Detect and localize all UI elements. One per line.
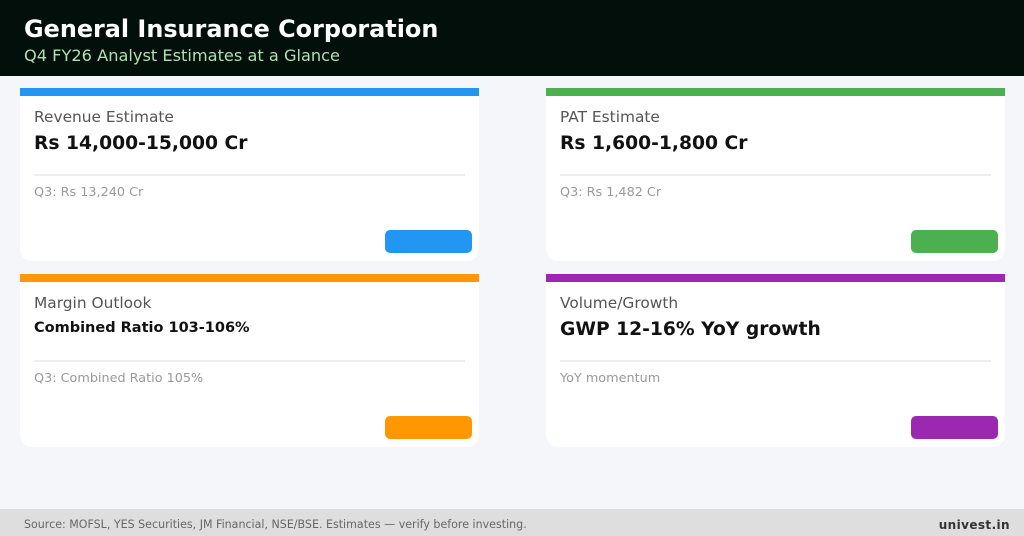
margin pill xyxy=(385,416,472,439)
margin accent bar xyxy=(20,274,479,282)
volume accent bar xyxy=(546,274,1005,282)
header band xyxy=(0,0,1024,76)
revenue value: Rs 14,000-15,000 Cr xyxy=(34,133,247,154)
revenue accent bar xyxy=(20,88,479,96)
footer band xyxy=(0,509,1024,536)
volume note: YoY momentum xyxy=(560,371,660,386)
revenue prior quarter: Q3: Rs 13,240 Cr xyxy=(34,185,143,200)
title: General Insurance Corporation xyxy=(24,15,438,43)
margin label: Margin Outlook xyxy=(34,294,151,312)
PAT prior quarter: Q3: Rs 1,482 Cr xyxy=(560,185,661,200)
brand: univest.in xyxy=(939,518,1010,532)
panel: revenue estimate xyxy=(20,88,479,261)
revenue label: Revenue Estimate xyxy=(34,108,174,126)
source note: Source: MOFSL, YES Securities, JM Financial, NSE/BSE. Estimates — verify before investing. xyxy=(24,518,527,531)
PAT label: PAT Estimate xyxy=(560,108,660,126)
margin value: Combined Ratio 103-106% xyxy=(34,320,250,336)
margin prior quarter: Q3: Combined Ratio 105% xyxy=(34,371,203,386)
panel: volume growth xyxy=(546,274,1005,447)
subtitle: Q4 FY26 Analyst Estimates at a Glance xyxy=(24,46,340,65)
panel: PAT estimate xyxy=(546,88,1005,261)
volume label: Volume/Growth xyxy=(560,294,678,312)
PAT accent bar xyxy=(546,88,1005,96)
revenue pill xyxy=(385,230,472,253)
panel: margin outlook xyxy=(20,274,479,447)
PAT pill xyxy=(911,230,998,253)
volume value: GWP 12-16% YoY growth xyxy=(560,319,821,340)
volume pill xyxy=(911,416,998,439)
PAT value: Rs 1,600-1,800 Cr xyxy=(560,133,747,154)
